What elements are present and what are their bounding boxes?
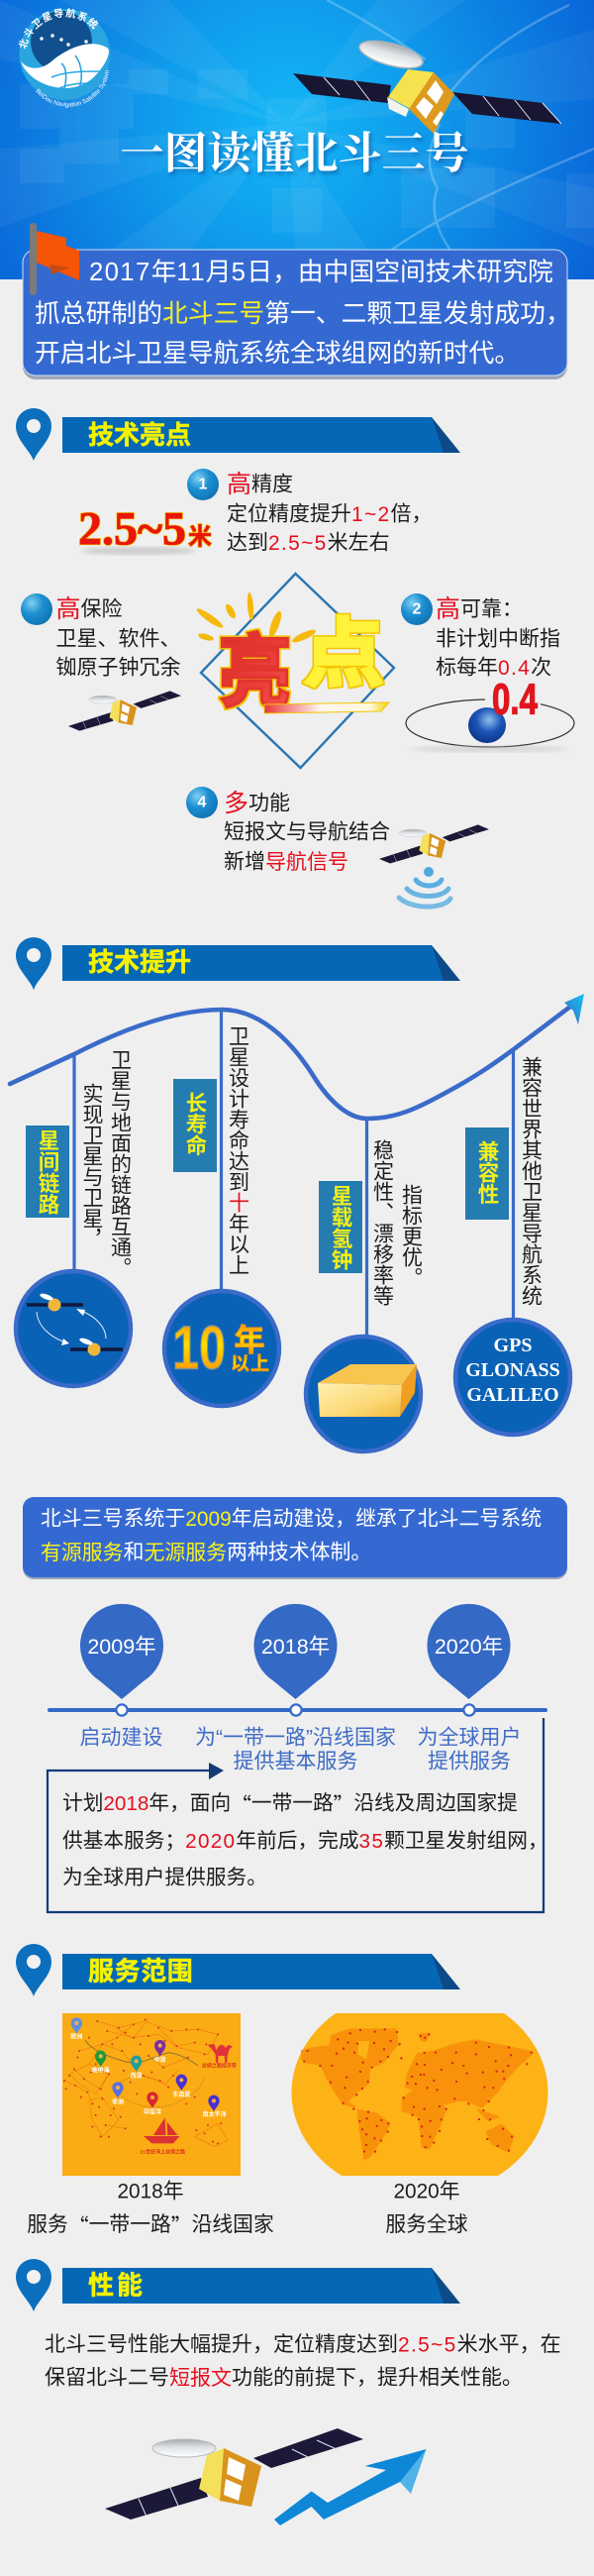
captions: service scope: 2020年 — [393, 2180, 460, 2203]
circle icon: 10 years: 年 — [234, 1324, 265, 1357]
map: Belt and Road 2018: 丝绸之路经济带 — [202, 2063, 237, 2070]
section heading: 技术提升: 技术提升 — [88, 947, 191, 977]
highlight 1: high precision — [187, 469, 433, 555]
intro text: 抓总研制的北斗三号第一、二颗卫星发射成功， — [35, 299, 571, 328]
highlight 2: high reliability: 2 — [413, 600, 422, 618]
highlight 4: multi function: 多功能 — [224, 790, 290, 817]
highlight 3: high assurance: 高保险 — [55, 595, 123, 623]
timeline: 为“一带一路”沿线国家 — [195, 1726, 396, 1750]
timeline: 为全球用户 — [418, 1726, 521, 1750]
panel: plan description: 计划2018年，面向“一带一路”沿线及周边国家提 — [62, 1788, 518, 1818]
section heading: 服务范围: 服务范围 — [88, 1956, 193, 1986]
panel: plan description: 供基本服务；2020年前后，完成35颗卫星发射组网， — [62, 1829, 548, 1853]
logo: BeiDou Navigation Satellite System: BeiDou Navigation Satellite System — [36, 70, 109, 108]
item: long life: 卫星设计寿命达到 十 年以上 — [226, 1025, 249, 1275]
map labels: 西亚 — [131, 2073, 143, 2080]
panel: tech highlights — [21, 469, 574, 907]
item: hydrogen clock: 星载氢钟 — [329, 1185, 352, 1270]
highlight 2: high reliability: 标每年0.4次 — [436, 656, 551, 680]
点: 点 — [303, 612, 384, 696]
highlight 3: high assurance: 铷原子钟冗余 — [55, 656, 180, 680]
item: compatibility: 兼容性 — [475, 1140, 499, 1205]
timeline: 2018年 — [261, 1635, 330, 1659]
section heading: 技术提升 — [16, 937, 460, 990]
circle icon: GNSS names: GLONASS — [465, 1359, 560, 1381]
map labels: 南太平洋 — [203, 2110, 227, 2118]
item: inter-satellite link: 实现卫星与卫星， — [80, 1083, 103, 1249]
circle icon: GNSS names: GALILEO — [466, 1384, 559, 1406]
highlight 2: high reliability: 高可靠： — [436, 595, 523, 623]
icon: signal waves — [399, 867, 450, 907]
item: long life — [164, 1025, 279, 1406]
section heading: 技术亮点 — [16, 408, 460, 461]
graphic: globe orbit with 0.4: 0.4 — [492, 676, 538, 723]
graphic: 2.5~5 metres: 米 — [188, 523, 212, 551]
milestone pins — [80, 1604, 511, 1699]
map labels: 地中海 — [92, 2067, 110, 2075]
highlight 1: high precision: 1 — [199, 476, 208, 493]
icon: satellite large bottom — [105, 2428, 363, 2520]
circle icon: satellites linked — [16, 1271, 131, 1386]
highlight 1: high precision: 高精度 — [227, 471, 293, 498]
timeline: 提供服务 — [428, 1750, 511, 1773]
map labels — [70, 2033, 227, 2118]
header banner — [0, 0, 594, 279]
highlight 4: multi function: 短报文与导航结合 — [224, 820, 390, 844]
continents — [302, 2029, 533, 2159]
circle icon: 10 years: 10 — [172, 1314, 226, 1383]
city dots — [304, 2029, 532, 2152]
section heading: 性能: 性能 — [88, 2271, 146, 2301]
map: Belt and Road 2018 — [62, 2013, 241, 2176]
item: compatibility — [455, 1056, 570, 1435]
intro text — [35, 258, 571, 368]
item: hydrogen clock: 稳定性、漂移率等 — [370, 1139, 394, 1306]
section heading: 技术亮点: 技术亮点 — [88, 420, 191, 450]
item: hydrogen clock — [306, 1139, 423, 1451]
item: inter-satellite link: 卫星与地面的链路互通。 — [109, 1049, 132, 1278]
axis — [48, 1708, 547, 1712]
icon: red flag — [30, 223, 79, 295]
drop lines — [74, 1010, 513, 1338]
circle icon: GNSS names — [455, 1320, 570, 1435]
intro text: 2017年11月5日，由中国空间技术研究院 — [89, 258, 553, 286]
icon: satellite small right — [379, 824, 489, 864]
item: long life: 长寿命 — [183, 1092, 207, 1156]
icon: rising arrow — [274, 2449, 426, 2525]
highlight 3: high assurance — [21, 593, 180, 680]
circle icon: gold clock box — [306, 1337, 421, 1451]
callout: BeiDou-3 build start — [23, 1497, 567, 1579]
satellite illustration in header — [293, 36, 561, 134]
highlight 1: high precision: 定位精度提升1~2倍， — [227, 503, 433, 525]
callout: BeiDou-3 build start: 有源服务和无源服务两种技术体制。 — [41, 1542, 371, 1563]
panel: plan description: 为全球用户提供服务。 — [62, 1867, 267, 1888]
text block: performance: 北斗三号性能大幅提升，定位精度达到2.5~5米水平，在 — [45, 2333, 561, 2356]
map labels: 欧洲 — [70, 2033, 82, 2041]
timeline: 2009年 — [87, 1635, 156, 1659]
title: 一图读懂北斗三号 — [121, 129, 469, 178]
captions: service scope: 2018年 — [117, 2180, 184, 2203]
callout: BeiDou-3 build start: 北斗三号系统于2009年启动建设，继承了北斗二号系统 — [41, 1508, 542, 1530]
text block: performance: 保留北斗二号短报文功能的前提下，提升相关性能。 — [45, 2366, 523, 2390]
rays — [195, 592, 317, 645]
section heading: 性能 — [16, 2259, 460, 2311]
curve with arrow — [10, 994, 584, 1119]
timeline: 提供基本服务 — [234, 1750, 358, 1773]
亮: 亮 — [219, 630, 291, 717]
panel: plan description — [48, 1718, 548, 1912]
icon: ship — [144, 2117, 180, 2143]
captions: service scope — [27, 2180, 468, 2239]
intro text: 开启北斗卫星导航系统全球组网的新时代。 — [35, 339, 520, 368]
chart: tech improvement curve — [10, 994, 584, 1451]
highlight 4: multi function — [186, 787, 390, 874]
timeline: 2020年 — [435, 1635, 503, 1659]
map labels: 中亚 — [154, 2056, 166, 2064]
map: Belt and Road 2018: 21世纪海上丝绸之路 — [141, 2149, 185, 2156]
item: hydrogen clock: 指标更优。 — [400, 1184, 423, 1288]
graphic: 2.5~5 metres: 2.5~5 — [78, 503, 186, 555]
circle icon: 10 years — [164, 1291, 279, 1406]
highlight 2: high reliability — [401, 593, 560, 680]
center diamond with 亮点 art — [195, 574, 394, 768]
intro callout — [23, 250, 571, 379]
graphic: globe orbit with 0.4 — [406, 676, 574, 752]
icon: satellite small left — [68, 691, 181, 731]
text block: performance — [45, 2333, 561, 2390]
circle icon: 10 years: 以上 — [231, 1353, 270, 1375]
item: compatibility: 兼容世界其他卫星导航系统 — [519, 1056, 543, 1306]
logo: BeiDou Navigation Satellite System: 北斗卫星导航系统 — [18, 8, 99, 50]
captions: service scope: 服务“一带一路”沿线国家 — [27, 2209, 274, 2239]
map labels: 非洲 — [112, 2097, 124, 2105]
highlight 4: multi function: 4 — [198, 795, 207, 810]
map: world 2020 — [291, 2013, 548, 2176]
underline stroke — [264, 702, 389, 713]
map labels: 印度洋 — [144, 2107, 161, 2115]
icon: camel — [209, 2044, 233, 2063]
highlight 2: high reliability: 非计划中断指 — [436, 628, 560, 650]
network nodes — [64, 2019, 221, 2143]
highlight 1: high precision: 达到2.5~5米左右 — [227, 531, 390, 555]
captions: service scope: 服务全球 — [385, 2213, 468, 2236]
network lines — [64, 2019, 228, 2147]
milestone labels: 启动建设 — [79, 1726, 162, 1750]
highlight 4: multi function: 新增导航信号 — [224, 850, 348, 874]
item: inter-satellite link — [16, 1049, 132, 1386]
location pins — [71, 2017, 220, 2111]
circle icon: GNSS names: GPS — [494, 1335, 532, 1356]
logo: BeiDou Navigation Satellite System — [18, 8, 111, 108]
item: inter-satellite link: 星间链路 — [36, 1129, 59, 1215]
highlight 3: high assurance: 卫星、软件、 — [55, 628, 180, 650]
map labels: 东南亚 — [172, 2091, 190, 2098]
timeline — [48, 1604, 547, 1773]
section heading: 服务范围 — [16, 1944, 460, 1996]
